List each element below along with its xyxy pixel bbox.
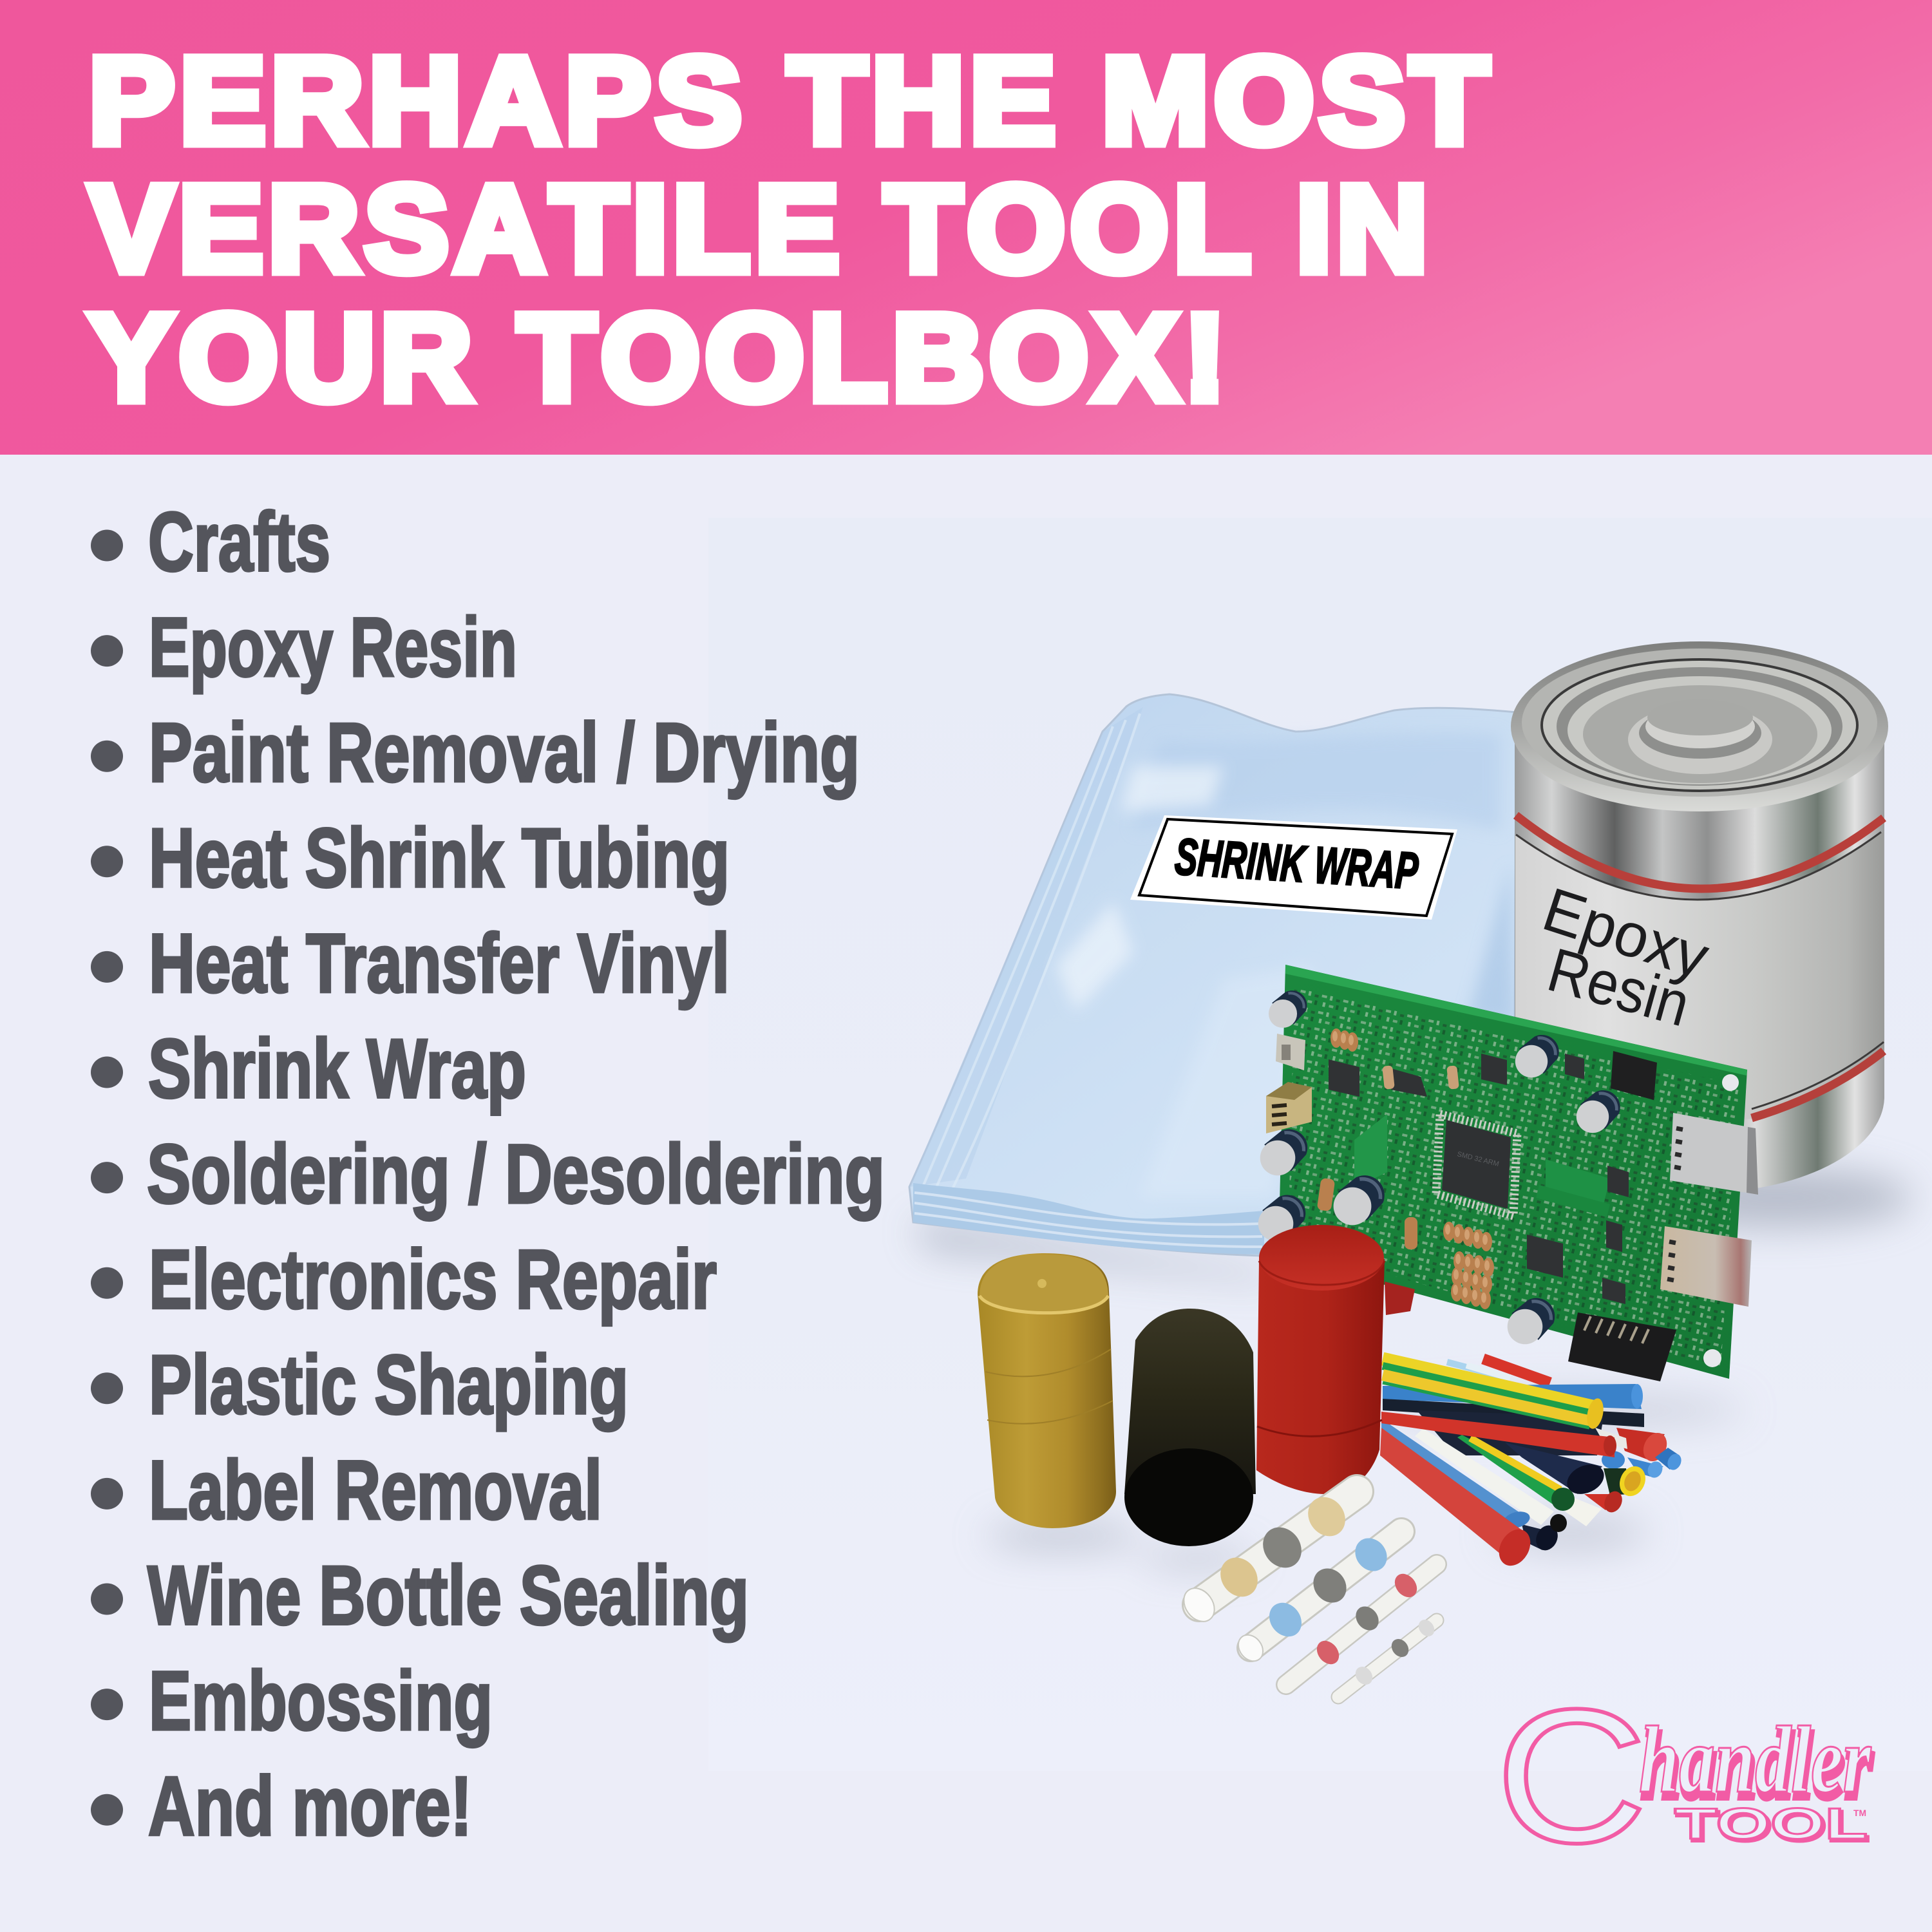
photo: red shrink tube (1256, 1225, 1385, 1494)
list item: Heat Shrink Tubing: Heat Shrink Tubing (149, 811, 730, 905)
bag side seam band (909, 707, 1143, 1187)
small clear splice (1338, 1616, 1437, 1697)
photo: epoxy resin can: Resin (1540, 935, 1697, 1040)
list item: Label Removal: Label Removal (149, 1443, 602, 1537)
logo: Chandler Tool: TM (1853, 1808, 1866, 1818)
panel: photo backdrop (708, 518, 1932, 1771)
title (89, 32, 1494, 426)
red splice (1286, 1564, 1437, 1685)
logo: Chandler Tool: C (1495, 1669, 1647, 1882)
can label area (1515, 832, 1884, 1121)
photo: black bottle capsule (1124, 1309, 1256, 1546)
main processor chip: SMD 32 ARM (1456, 1150, 1500, 1168)
photo: shrink wrap bag (909, 694, 1517, 1256)
list item: Paint Removal / Drying: Paint Removal / Drying (149, 705, 860, 799)
resistor clusters (1317, 1028, 1494, 1309)
list item: Epoxy Resin: Epoxy Resin (149, 600, 517, 694)
list item: Crafts: Crafts (148, 495, 330, 589)
photo: product shadows (914, 1168, 1913, 1567)
list item: Plastic Shaping: Plastic Shaping (149, 1338, 629, 1432)
bag tone patches (1133, 733, 1501, 831)
red board connector (1385, 1282, 1415, 1315)
list item: Embossing (91, 1654, 493, 1748)
photo: gold bottle capsule (978, 1253, 1116, 1528)
black pin header (1568, 1312, 1676, 1381)
DC jack (1611, 1051, 1657, 1100)
logo: Chandler Tool: TOOL (1676, 1802, 1870, 1851)
can text: Epoxy (1535, 875, 1717, 992)
photo: circuit board (1258, 965, 1758, 1381)
logo: Chandler Tool (1495, 1669, 1873, 1882)
lower tubing fan (1380, 1419, 1609, 1571)
right side tube ends (1584, 1428, 1684, 1515)
header band (0, 0, 1932, 455)
main processor chip (1436, 1114, 1517, 1216)
photo: epoxy resin can (1511, 641, 1888, 1193)
list item: Embossing: Embossing (149, 1654, 493, 1748)
can lid (1511, 641, 1888, 811)
photo: butt splice connectors (1178, 1490, 1437, 1697)
back tubes (1383, 1359, 1644, 1455)
blue splice (1233, 1531, 1401, 1666)
white and gold connectors (1266, 1034, 1312, 1133)
label: SHRINK WRAP: SHRINK WRAP (1173, 828, 1420, 900)
list item: Soldering / Desoldering: Soldering / Desoldering (147, 1127, 885, 1221)
photo: heat shrink tubing bundle (1380, 1359, 1684, 1571)
title: YOUR TOOLBOX! (89, 289, 1231, 426)
list item: And more!: And more! (148, 1759, 472, 1853)
smaller chips (1329, 1054, 1629, 1304)
USB ports (1660, 1113, 1758, 1307)
title: VERSATILE TOOL IN (90, 160, 1433, 298)
upper tubing bundle (1381, 1359, 1616, 1457)
list item: Shrink Wrap: Shrink Wrap (148, 1021, 526, 1115)
list item: And more! (91, 1759, 472, 1853)
list item: Electronics Repair: Electronics Repair (149, 1232, 717, 1326)
large gold splice (1178, 1490, 1357, 1627)
mounting holes (1703, 1074, 1739, 1367)
list item: Crafts (91, 495, 330, 589)
list item: Label Removal (91, 1443, 602, 1537)
list item: Heat Transfer Vinyl: Heat Transfer Vinyl (149, 916, 730, 1010)
list item: Shrink Wrap (91, 1021, 526, 1115)
board traces and pads (1354, 1114, 1387, 1188)
list item: Epoxy Resin (91, 600, 517, 694)
capacitors (1258, 990, 1620, 1344)
title: PERHAPS THE MOST (89, 32, 1494, 169)
logo: Chandler Tool: TOOL (1674, 1799, 1868, 1848)
bullet list of uses (91, 495, 885, 1853)
list item: Wine Bottle Sealing: Wine Bottle Sealing (147, 1548, 749, 1642)
bag bottom layers (913, 1183, 1264, 1255)
label: SHRINK WRAP (1130, 815, 1457, 920)
